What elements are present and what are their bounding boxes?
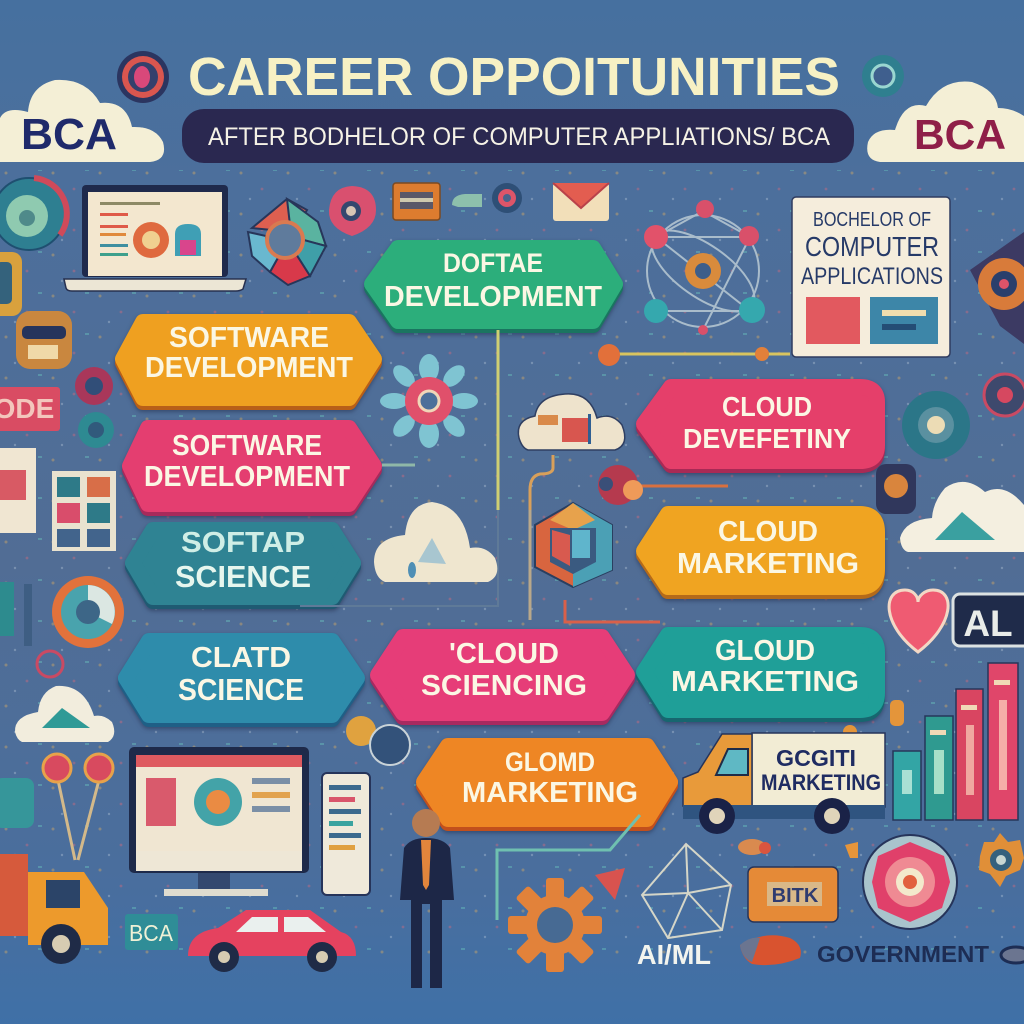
cloud badge: BCA right [867, 82, 1024, 162]
icon: small truck bottom-left [0, 854, 108, 964]
icon: pin near gear [595, 868, 625, 900]
icon: desktop monitor [129, 747, 309, 896]
icon: top-right gear [862, 55, 904, 97]
banner: glomd marketing [424, 746, 670, 819]
icon: connector dots top [452, 183, 522, 213]
icon: orange cluster above tag [738, 839, 858, 858]
icon: heart [889, 590, 948, 652]
banner: doftae development: DOFTAE [443, 248, 543, 278]
icon: dial left [0, 178, 67, 250]
banner: clatd science [126, 641, 357, 715]
banner: doftae development [372, 248, 615, 321]
label: government: GOVERNMENT [817, 941, 989, 967]
cloud badge: BCA right: BCA [914, 111, 1006, 158]
icon: code label [0, 387, 60, 431]
banner: software development second: SOFTWARE [172, 430, 322, 462]
banner: gloud marketing teal: MARKETING [671, 666, 859, 698]
icon: oval right bottom [1001, 947, 1024, 963]
icon: smartphone [322, 773, 370, 895]
icon: orange tag [748, 867, 838, 922]
banner: software development top-left: DEVELOPMENT [145, 352, 353, 384]
icon: pins left [43, 754, 113, 860]
icon: dot on line [598, 344, 769, 366]
icon: top-left target [117, 51, 169, 103]
icon: laptop [64, 185, 246, 291]
icon: robot face [16, 311, 72, 369]
icon: document left [0, 448, 36, 533]
banner: glomd marketing: MARKETING [462, 777, 638, 809]
icon: orange tick marks [843, 700, 904, 739]
icon: gear bottom-right [979, 833, 1024, 887]
icon: left box edge [0, 252, 22, 316]
icon: badge right [876, 464, 916, 514]
subtitle banner: AFTER BODHELOR OF COMPUTER APPLIATIONS/ BCA [208, 123, 830, 151]
icon: delivery truck: GCGITI [776, 745, 856, 771]
banner: cloud marketing orange: CLOUD [718, 516, 818, 548]
cloud badge: BCA left: BCA [21, 110, 117, 159]
banner: cloud marketing orange [644, 514, 877, 587]
banner: cloud devefetiny [644, 387, 877, 461]
icon: network right [984, 374, 1024, 416]
banner: gloud marketing teal [644, 635, 877, 710]
subtitle banner [182, 109, 854, 163]
banner: software development top-left [123, 322, 374, 398]
icon: tile grid [52, 471, 116, 551]
icon: small target top [329, 186, 376, 236]
panel: Bachelor of Computer Applications: APPLICATIONS [801, 263, 943, 290]
banner: glomd marketing: GLOMD [505, 747, 595, 777]
label: AI/ML: AI/ML [637, 939, 711, 970]
icon: polyhedron [642, 844, 731, 938]
icon: flower gear centre [380, 354, 478, 448]
label: AI sign [953, 594, 1024, 646]
icon: delivery truck [683, 733, 885, 834]
icon: red bird [740, 935, 801, 965]
banner: gloud marketing teal: GLOUD [715, 635, 815, 667]
icon: small gear right of cloud [902, 391, 970, 459]
banner: cloud devefetiny: CLOUD [722, 391, 812, 422]
connector lines [300, 330, 790, 920]
banner: clatd science: SCIENCE [178, 672, 304, 707]
icon: orange gear [508, 878, 602, 972]
icon: left teal box [0, 778, 34, 828]
label: BCA tag [125, 914, 178, 950]
icon: pie chart [52, 576, 124, 648]
icon: small cloud middle [518, 394, 625, 450]
panel: Bachelor of Computer Applications [792, 197, 950, 357]
banner: cloud devefetiny: DEVEFETINY [683, 423, 851, 454]
icon: small cloud lower-left [15, 686, 114, 742]
banner: clatd science: CLATD [191, 642, 291, 674]
bar chart: books [893, 663, 1018, 820]
banner: software science: SCIENCE [175, 559, 311, 594]
panel: Bachelor of Computer Applications: BOCHELOR OF [813, 209, 931, 231]
icon: large target [863, 835, 957, 929]
icon: left side bars [0, 582, 63, 677]
icon: red cluster [598, 465, 643, 505]
icon: folder [393, 183, 440, 220]
title: CAREER OPPOITUNITIES [188, 47, 840, 107]
label: BCA tag: BCA [129, 920, 174, 946]
icon: cloud right [900, 482, 1024, 552]
banner: cloud sciencing: SCIENCING [421, 670, 587, 702]
icon: delivery truck: MARKETING [761, 770, 881, 795]
cloud badge: BCA left [0, 80, 164, 162]
icon: envelope [553, 183, 609, 221]
icon: cloud left of centre [374, 502, 497, 582]
banner: software development second: DEVELOPMENT [144, 461, 350, 493]
icon: orange tag: BITK [772, 885, 819, 907]
banner: cloud marketing orange: MARKETING [677, 548, 859, 580]
banner: cloud sciencing: 'CLOUD [449, 638, 559, 670]
banner: software development top-left: SOFTWARE [169, 322, 329, 354]
icon: person in suit [400, 809, 454, 988]
banner: doftae development: DEVELOPMENT [384, 281, 602, 313]
banner: cloud sciencing [378, 637, 627, 713]
banner: software development second [130, 428, 374, 504]
icon: hexagon cube [535, 503, 612, 587]
icon: atom network [639, 200, 767, 335]
icon: red car [188, 910, 356, 972]
banner: software science: SOFTAP [181, 527, 305, 559]
panel: Bachelor of Computer Applications: COMPUTER [805, 231, 939, 262]
icon: cluster near monitor [346, 716, 410, 765]
icon: colourful wheel [248, 199, 326, 285]
banner: software science [133, 527, 353, 597]
icon: ring left [75, 367, 114, 448]
icon: right eye gear [970, 232, 1024, 344]
label: AI sign: AL [963, 603, 1013, 644]
